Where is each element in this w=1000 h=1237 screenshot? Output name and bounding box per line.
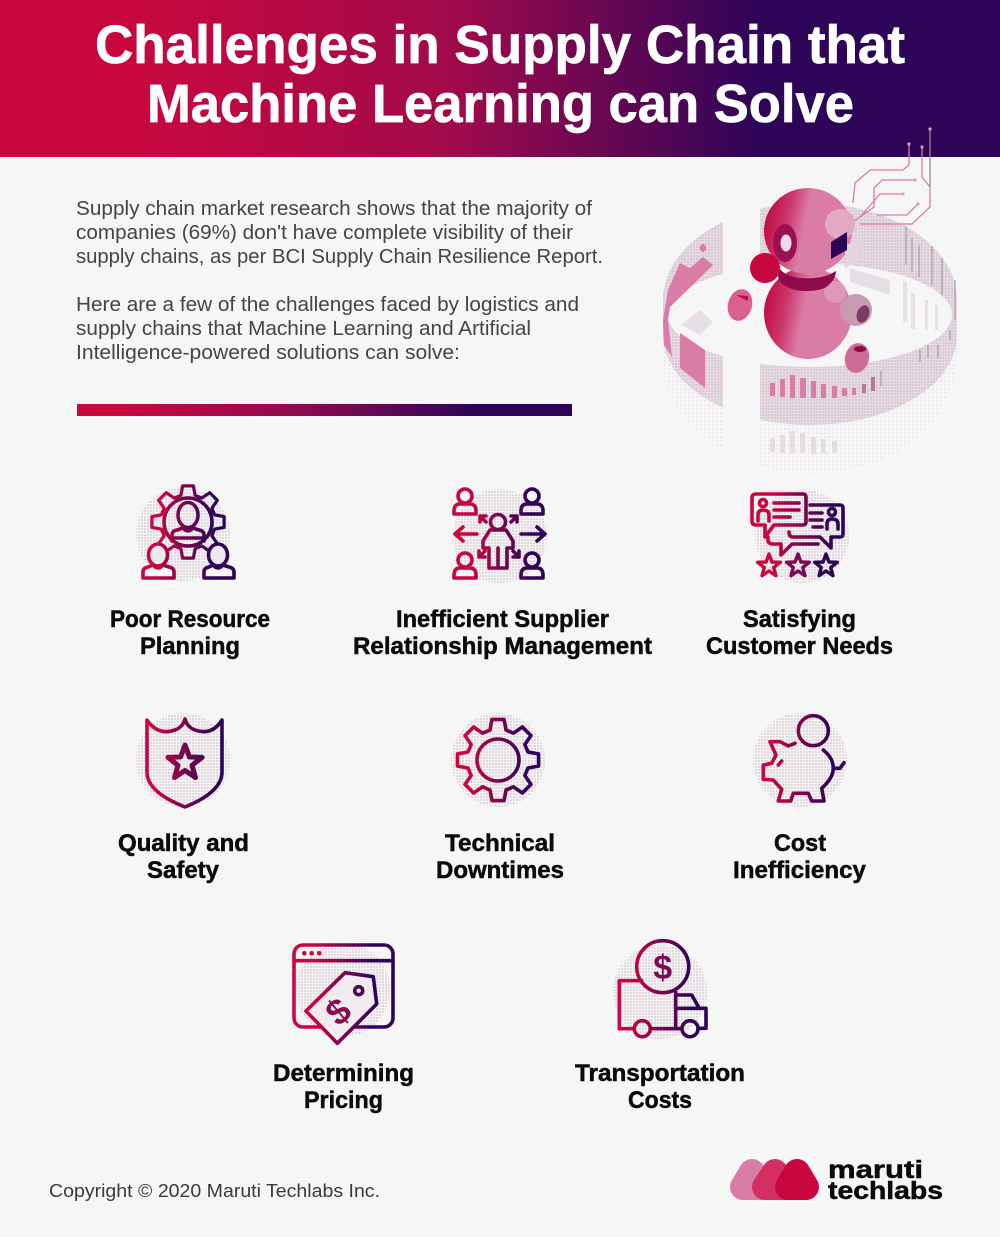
- body highlight: [824, 281, 846, 303]
- window dots: [302, 951, 322, 956]
- robot collar: [778, 269, 836, 291]
- area chart panel: [663, 257, 713, 357]
- intro text: supply chains that Machine Learning and Artificial: [76, 317, 531, 340]
- label: transportation costs: Costs: [628, 1087, 692, 1114]
- intro text: Intelligence-powered solutions can solve:: [76, 341, 460, 364]
- icon 1: resource planning gear: [136, 486, 234, 581]
- logo wordmark: techlabs: [828, 1177, 943, 1205]
- intro text: Here are a few of the challenges faced by logistics and: [76, 293, 579, 316]
- dollar on coin: $: [653, 949, 672, 987]
- label: quality and safety: Safety: [147, 857, 220, 884]
- icon 2: supplier relationships: [453, 489, 547, 583]
- holographic ring band: [663, 203, 957, 425]
- header banner: [0, 0, 1000, 157]
- label: quality and safety: [118, 830, 249, 884]
- circuit tips: [901, 127, 932, 206]
- label: supplier relationship: Inefficient Supplier: [396, 606, 609, 633]
- icon 7: price tag on window: [294, 943, 393, 1043]
- intro text: supply chains, as per BCI Supply Chain Resilience Report.: [76, 245, 603, 268]
- label: cost inefficiency: Cost: [774, 830, 826, 857]
- label: supplier relationship: [353, 606, 652, 660]
- label: determining pricing: Pricing: [304, 1087, 383, 1114]
- icon 6: piggy bank: [753, 713, 847, 807]
- intro text: Supply chain market research shows that the majority of: [76, 197, 592, 220]
- faint back panels inside ring: [681, 268, 938, 335]
- label: supplier relationship: Relationship Management: [353, 633, 652, 660]
- icon 8: truck with dollar coin: [613, 941, 707, 1039]
- copyright: Copyright © 2020 Maruti Techlabs Inc.: [49, 1181, 380, 1201]
- title: Challenges in Supply Chain that: [95, 15, 905, 75]
- label: poor resource planning: [110, 606, 270, 660]
- robot head: [764, 188, 852, 274]
- robot eye: [773, 224, 797, 262]
- label: quality and safety: Quality and: [118, 830, 249, 857]
- robot body: [764, 267, 852, 359]
- logo mark: [743, 1172, 806, 1187]
- icon 5: gear: [451, 713, 545, 807]
- label: transportation costs: [575, 1060, 745, 1114]
- label: technical downtimes: [436, 830, 564, 884]
- label: determining pricing: [273, 1060, 414, 1114]
- floating pod right: [840, 294, 872, 326]
- circuit traces: [853, 130, 930, 224]
- chart blob: [700, 244, 706, 252]
- label: customer needs: Satisfying: [743, 606, 856, 633]
- icon 4: shield with star: [136, 713, 230, 807]
- label: transportation costs: Transportation: [575, 1060, 745, 1087]
- logo wordmark: [828, 1156, 943, 1205]
- label: customer needs: Customer Needs: [706, 633, 893, 660]
- floating pod left: [724, 286, 756, 324]
- label: cost inefficiency: Inefficiency: [733, 857, 867, 884]
- logo wordmark: maruti: [828, 1156, 923, 1184]
- dollar on tag: $: [317, 989, 359, 1034]
- bar chart on ring: [770, 375, 875, 398]
- title: Machine Learning can Solve: [147, 74, 854, 134]
- icon 3: customer needs: [752, 489, 849, 583]
- ghost bars: [770, 431, 837, 454]
- label: cost inefficiency: [733, 830, 867, 884]
- gradient divider bar: [77, 404, 572, 416]
- robot chest screen: [831, 232, 847, 259]
- pink chart panel: [680, 333, 705, 388]
- label: technical downtimes: Downtimes: [436, 857, 564, 884]
- right side data columns: [881, 226, 955, 386]
- logo: [743, 1156, 943, 1205]
- illustration: robot with holographic ring: [663, 127, 957, 473]
- label: poor resource planning: Planning: [140, 633, 240, 660]
- label: customer needs: [706, 606, 893, 660]
- title: [95, 15, 905, 134]
- robot side box: [845, 240, 862, 268]
- intro text: companies (69%) don't have complete visibility of their: [76, 221, 573, 244]
- label: poor resource planning: Poor Resource: [110, 606, 270, 633]
- ghost reflection of ring: [663, 335, 957, 473]
- label: determining pricing: Determining: [273, 1060, 414, 1087]
- label: technical downtimes: Technical: [445, 830, 555, 857]
- robot left ear: [750, 253, 780, 283]
- intro text: [76, 197, 603, 364]
- robot eye lens: [780, 234, 792, 252]
- floating pod lower: [842, 340, 872, 376]
- head highlight: [825, 209, 855, 239]
